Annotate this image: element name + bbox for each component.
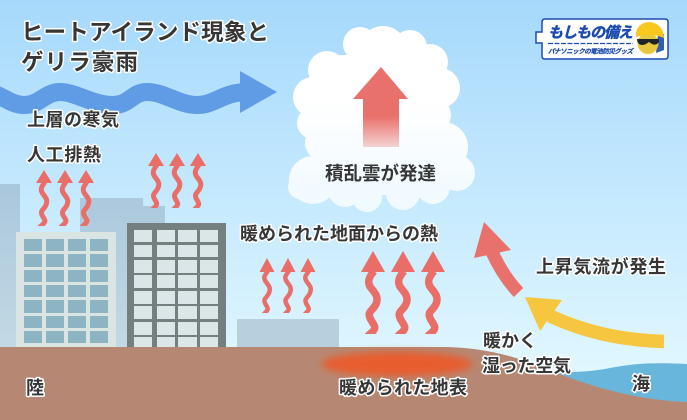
icon: mascot with helmet	[636, 22, 664, 54]
dark office building	[127, 223, 226, 347]
land	[0, 347, 687, 420]
label: warm moist air	[482, 331, 571, 376]
low building	[237, 319, 339, 347]
title: ヒートアイランド現象と	[21, 20, 269, 45]
ground heat arrows, large	[361, 251, 445, 339]
logo badge: もしもの備え	[548, 24, 633, 42]
waste heat arrows, right	[148, 153, 206, 212]
label: land: 陸	[26, 378, 44, 398]
background buildings	[0, 184, 165, 347]
heated ground surface	[321, 352, 473, 376]
light office building	[16, 232, 116, 347]
label: upper cold air: 上層の寒気	[27, 109, 119, 130]
logo badge: パナソニックの電池防災グッズ	[548, 48, 634, 56]
label: heat from warmed ground: 暖められた地面からの熱	[240, 224, 438, 244]
label: sea: 海	[632, 374, 650, 394]
yellow moist air curved arrow	[525, 297, 664, 342]
sea	[540, 363, 687, 410]
waste heat arrows, left	[36, 170, 94, 230]
label: warm moist air: 暖かく	[483, 331, 537, 351]
cloud label: 積乱雲が発達	[325, 163, 436, 184]
label: warm moist air: 湿った空気	[482, 355, 571, 376]
ground heat arrows, small	[260, 258, 316, 317]
cloud	[288, 26, 475, 212]
title	[21, 20, 269, 75]
upper cold air wave arrow	[0, 71, 277, 113]
title: ゲリラ豪雨	[21, 50, 138, 75]
label: warmed ground surface: 暖められた地表	[339, 378, 467, 398]
big upward arrow in cloud	[353, 67, 408, 147]
label: waste heat: 人工排熱	[27, 145, 101, 165]
red rising air curved arrow	[474, 222, 518, 292]
logo badge	[536, 19, 668, 59]
label: updraft occurs: 上昇気流が発生	[536, 256, 666, 277]
